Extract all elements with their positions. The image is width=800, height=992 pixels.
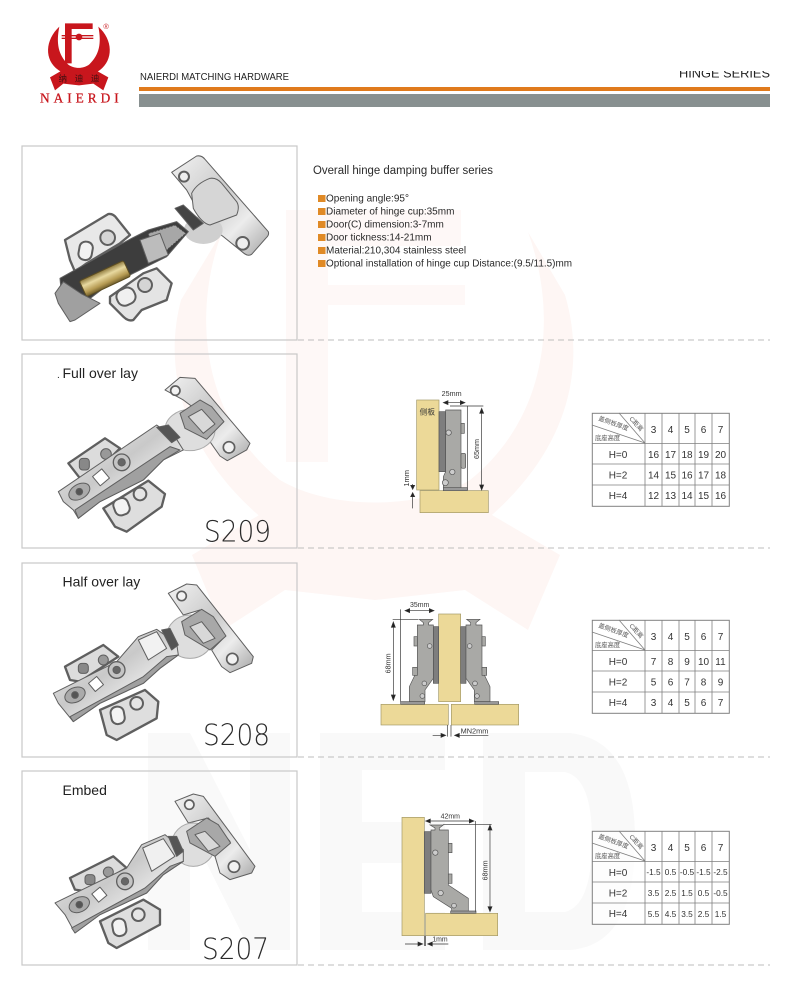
logo banner [50,70,108,90]
dimension labels: 68mm [383,653,392,673]
specification list: Door tickness:14-21mm [326,232,432,244]
panel: overall hinge [22,146,297,340]
right hinge side view [461,619,499,704]
table values [609,425,726,502]
hinge side view [439,410,467,491]
dimension labels: 42mm [441,811,460,820]
table values: 12 [648,491,659,502]
specification list: Material:210,304 stainless steel [326,246,466,256]
table values: 0.5 [665,867,677,877]
table values: 3 [651,843,657,854]
table header labels: C距离 [628,414,646,433]
side panel and base [402,817,498,936]
table header labels: 底座高度 [595,433,621,442]
table values: -2.5 [713,867,728,877]
logo F mark [62,23,93,63]
logo [40,22,119,106]
table values: 7 [718,425,724,436]
table values: 4.5 [665,909,677,919]
dimension labels: 65mm [472,439,481,459]
table values [609,843,728,920]
table values: 7 [651,657,657,668]
table values: 4 [668,425,674,436]
table values: 20 [715,450,726,461]
diagram: half overlay dimensions [381,600,519,737]
panel title: Embed [62,782,107,798]
hinge photo S208 [53,584,253,740]
table values: 6 [701,698,707,709]
table values: 15 [698,491,709,502]
table header labels: 底座高度 [595,851,621,860]
description heading: Overall hinge damping buffer series [313,165,493,177]
table values: 5 [684,632,690,643]
table values: 16 [715,491,726,502]
table values: 7 [718,843,724,854]
table values: 18 [715,470,726,482]
panels and bases [381,614,519,725]
hinge photo S209 [58,377,250,532]
table values: 6 [668,678,674,688]
panel: S209 full over lay [22,354,297,548]
table values: 15 [665,470,676,482]
table values: 5 [684,425,690,436]
hinge photo S207 [55,794,255,948]
table values: 6 [701,843,707,854]
table values: -1.5 [646,867,661,877]
registered mark: ® [103,22,109,31]
diagram: full overlay dimensions [402,389,488,513]
table values: H=4 [609,909,628,920]
side panel and base [417,400,488,513]
table values: 7 [718,698,724,709]
dimension labels [383,600,488,735]
table values: 4 [668,632,674,643]
dimension lines [405,819,492,946]
specification list: Door(C) dimension:3-7mm [326,220,444,230]
dimension labels: 1mm [432,935,448,944]
dimension labels: 1mm [402,470,411,487]
watermark: pale logo [175,210,573,630]
logo wordmark: NAIERDI [40,91,119,106]
table values: 18 [681,450,693,461]
dimension lines [391,609,488,737]
specification list: Optional installation of hinge cup Distance:(9.5/11.5)mm [326,258,572,270]
table values: 6 [701,425,707,436]
product description [313,165,572,270]
table values: 5.5 [648,909,660,919]
table: embed [592,831,729,924]
table values [609,632,726,709]
hinge side view [424,825,476,913]
table values: 7 [718,632,724,643]
table header labels [595,413,646,442]
table values: H=2 [609,888,628,900]
table values: 9 [718,678,724,688]
table values: 4 [668,698,674,709]
table values: 2.5 [665,888,677,898]
orange header bar [139,87,770,91]
clipped series label: HINGE SERIES [679,66,770,80]
diagram: embed dimensions [402,811,498,946]
panel: S208 half over lay [22,563,297,757]
model number: S208 [203,718,270,752]
table values: 6 [701,632,707,643]
table header labels: 底座高度 [595,640,621,649]
table values: 9 [684,657,690,668]
table: full overlay [592,413,729,506]
table values: 17 [665,450,676,461]
table values: 3 [651,425,657,436]
dimension lines [411,401,484,508]
table values: 5 [651,678,657,688]
table values: 1.5 [715,909,727,919]
table values: H=4 [609,491,628,502]
dimension labels [402,389,481,487]
table values: 5 [684,698,690,709]
header label: NAIERDI MATCHING HARDWARE [140,72,289,83]
table values: -1.5 [696,867,711,877]
dimension labels: 25mm [442,389,462,398]
table values: H=4 [609,698,628,709]
table values: 3.5 [681,909,693,919]
dimension labels [432,811,490,944]
logo crescent [48,27,110,77]
specification list: Diameter of hinge cup:35mm [326,206,454,218]
table values: 10 [698,657,709,668]
table values: 14 [648,470,659,482]
table values: 14 [681,491,693,502]
table header labels: 盖侧板厚度 [597,831,631,851]
grey header bar [139,94,770,107]
panel title: . [57,370,60,381]
table values: H=0 [609,450,628,461]
table values: 16 [681,470,693,482]
table values: H=2 [609,678,628,688]
table header labels: C距离 [628,621,646,640]
table values: 1.5 [681,888,693,898]
table header labels: 盖侧板厚度 [597,413,631,433]
dimension labels: 68mm [481,860,490,880]
table header labels: C距离 [628,832,646,851]
table values: H=0 [609,657,628,668]
table values: -0.5 [680,867,695,877]
table values: 11 [715,657,726,668]
table values: 3 [651,632,657,643]
logo chinese characters: 纳 迪 迪 [59,73,99,85]
table values: 8 [668,657,674,668]
table values: 7 [684,678,690,688]
table values: 17 [698,470,709,482]
table values: 8 [701,678,707,688]
side panel label: 侧板 [420,406,435,417]
table header labels [595,831,646,860]
dimension labels: 35mm [410,600,429,609]
table values: 5 [684,843,690,854]
table values: -0.5 [713,888,728,898]
specification list: Opening angle:95° [326,194,409,204]
table values: 0.5 [698,888,710,898]
table: half overlay [592,620,729,713]
watermark: pale NED letters [148,733,635,950]
panel: S207 embed [22,771,297,966]
table values: H=0 [609,868,628,879]
table values: H=2 [609,470,628,482]
table values: 13 [665,491,676,502]
table values: 3 [651,698,657,709]
table header labels [595,620,646,649]
left hinge side view [401,619,439,704]
model number: S207 [202,932,269,966]
table values: 4 [668,843,674,854]
model number: S209 [204,514,271,548]
panel title: Full over lay [62,365,138,381]
table header labels: 盖侧板厚度 [597,620,631,640]
table values: 3.5 [648,888,660,898]
panel title: Half over lay [62,574,140,590]
hinge photo: damping cutaway [55,156,269,322]
table values: 19 [698,450,709,461]
dimension labels: MN2mm [461,726,488,735]
specification list [318,194,572,270]
table values: 2.5 [698,909,710,919]
table values: 16 [648,450,659,461]
